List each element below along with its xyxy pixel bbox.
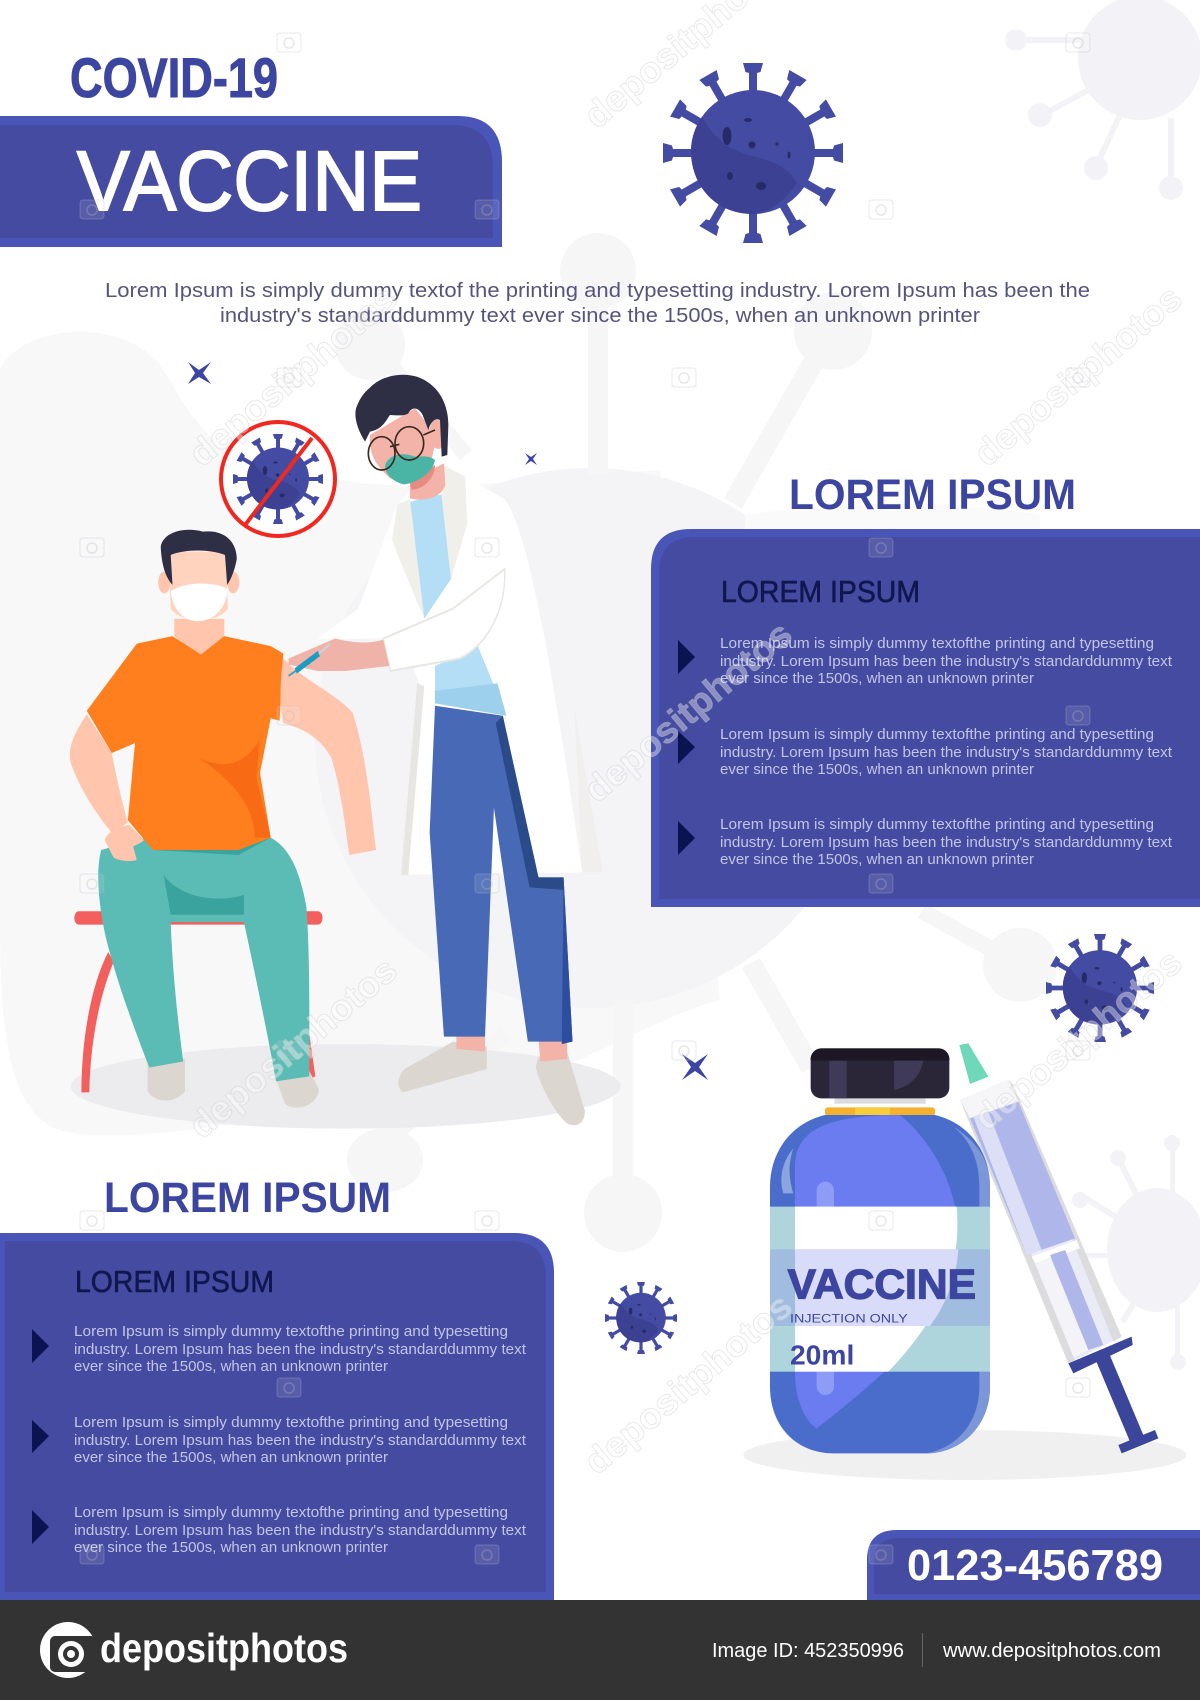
- text block 2: [720, 726, 1173, 778]
- bottle: [770, 1048, 990, 1453]
- illustration: vaccine bottle and syringe: [743, 1043, 1187, 1480]
- text block 1: [720, 635, 1173, 687]
- arrow 3: [678, 821, 695, 855]
- arrow 1: [678, 640, 695, 674]
- arrow 3: [32, 1510, 49, 1544]
- intro text: industry's standarddummy text ever since the 1500s, when an unknown printer: [220, 305, 980, 327]
- doctor head: [355, 375, 448, 500]
- watermark camera icons: [80, 33, 1090, 1564]
- stool: [74, 911, 322, 1092]
- text block 3: [74, 1504, 527, 1556]
- panel: phone number: [867, 1530, 1200, 1600]
- title: COVID-19: COVID-19: [70, 46, 278, 109]
- image id: Image ID: 452350996: [712, 1640, 904, 1662]
- icon: large virus: [663, 63, 843, 243]
- patient: [70, 530, 376, 1108]
- logo text: depositphotos: [100, 1625, 348, 1671]
- icon: small star sparkle: [525, 453, 537, 465]
- arrow 2: [678, 731, 695, 764]
- watermarks: depositphotos: [576, 613, 800, 810]
- phone text: 0123-456789: [907, 1541, 1163, 1590]
- heading: right section: LOREM IPSUM: [789, 471, 1076, 519]
- watermarks: depositphotos: [966, 941, 1190, 1138]
- intro text: Lorem Ipsum is simply dummy textof the printing and typesetting industry. Lorem Ipsum has been the: [105, 280, 1090, 302]
- website: www.depositphotos.com: [942, 1640, 1161, 1662]
- bottle label: VACCINE: [788, 1260, 976, 1307]
- panel subheading: LOREM IPSUM: [75, 1264, 274, 1299]
- icon: small virus: [605, 1282, 677, 1354]
- text block 2: [74, 1414, 527, 1466]
- icon: medium virus: [1046, 934, 1154, 1042]
- banner: vaccine: [0, 116, 502, 247]
- panel subheading: LOREM IPSUM: [721, 574, 920, 609]
- syringe: [959, 1043, 1158, 1453]
- panel: right: [651, 529, 1200, 907]
- footer bar: [0, 1600, 1200, 1700]
- arrow 1: [32, 1329, 49, 1363]
- bottle volume: 20ml: [790, 1340, 854, 1371]
- intro text: [105, 280, 1090, 327]
- shadow: [743, 1430, 1187, 1480]
- bottle sublabel: INJECTION ONLY: [790, 1311, 908, 1325]
- heading: left section: LOREM IPSUM: [104, 1174, 391, 1222]
- icon: no virus sign: [221, 422, 335, 536]
- watermarks: depositphotos: [576, 1285, 800, 1482]
- icon: star sparkle: [188, 362, 211, 384]
- icon: camera logo: [40, 1622, 96, 1678]
- watermarks: [181, 0, 1190, 1482]
- text block 1: [74, 1323, 527, 1375]
- panel: left: [0, 1233, 554, 1600]
- doctor body: [289, 460, 603, 1125]
- watermarks: depositphotos: [181, 277, 405, 474]
- arrow 2: [32, 1420, 49, 1453]
- text block 3: [720, 816, 1173, 868]
- floor shadow: [71, 1044, 621, 1129]
- watermarks: depositphotos: [966, 277, 1190, 474]
- banner title: VACCINE: [77, 134, 422, 228]
- icon: star sparkle lower: [682, 1054, 708, 1080]
- watermarks: depositphotos: [181, 949, 405, 1146]
- illustration: doctor vaccinating patient: [70, 460, 621, 1129]
